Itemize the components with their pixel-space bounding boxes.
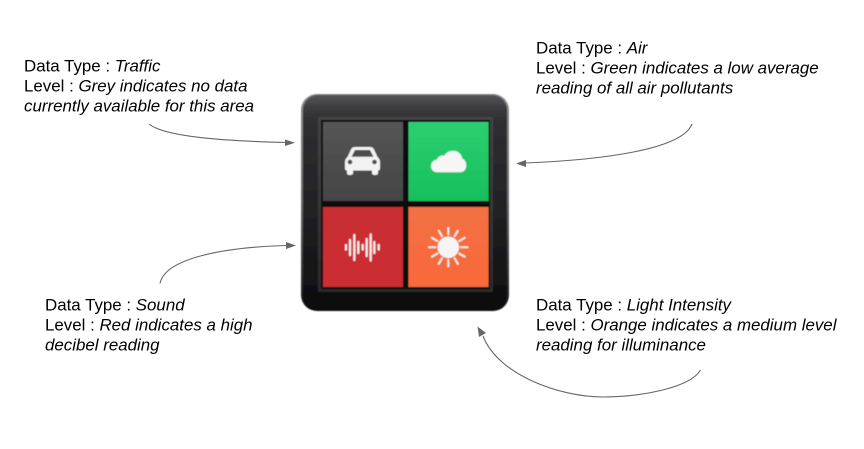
callout: air: reading of all air pollutants xyxy=(536,78,734,98)
callout: air: Green indicates a low average xyxy=(590,58,819,78)
callout: air: Level : xyxy=(536,58,590,78)
device: watch face xyxy=(301,94,509,311)
tile: air green xyxy=(408,122,488,201)
arrow: traffic callout to grey tile xyxy=(149,124,295,146)
arrow: air callout to green tile xyxy=(516,124,692,167)
callout: sound: decibel reading xyxy=(45,336,160,354)
icon: car xyxy=(345,147,380,175)
tile: sound red xyxy=(323,207,403,287)
arrow: light callout to orange tile xyxy=(478,326,700,397)
callout: light intensity: Orange indicates a medium level xyxy=(590,316,838,334)
icon: cloud xyxy=(431,151,466,172)
callout: light intensity: reading for illuminance xyxy=(536,336,706,354)
arrow: sound callout to red tile xyxy=(160,242,296,284)
tile: traffic grey xyxy=(323,122,403,201)
callout: traffic: Data Type : Traffic xyxy=(24,56,160,76)
callout: traffic: Level : xyxy=(24,76,78,96)
callout: light intensity: Data Type : Light Intensity xyxy=(536,296,731,314)
callout: sound: Data Type : Sound xyxy=(45,296,185,314)
callout: sound: Level : xyxy=(45,316,99,334)
callout: sound: Red indicates a high xyxy=(99,316,253,334)
tile: light orange xyxy=(408,207,488,287)
callout: traffic: Grey indicates no data xyxy=(78,76,247,96)
icon: sound wave xyxy=(346,234,379,260)
icon: sun xyxy=(429,228,468,266)
callout: traffic: currently available for this area xyxy=(24,96,254,116)
callout: air: Data Type : Air xyxy=(536,38,647,58)
callout: light intensity: Level : xyxy=(536,316,590,334)
